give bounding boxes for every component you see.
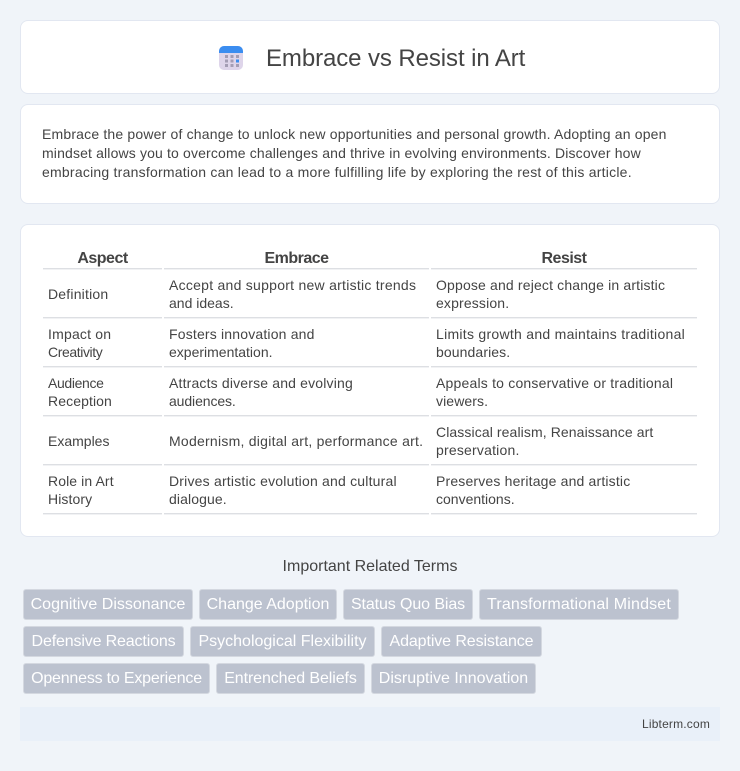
- related terms tags: Change Adoption: [207, 596, 329, 613]
- row: impact on creativity: Fosters innovation and: [169, 326, 315, 342]
- table header: Resist: [541, 250, 587, 267]
- intro text: [42, 126, 667, 180]
- row: audience reception: Appeals to conservative or traditional: [436, 375, 673, 391]
- row: impact on creativity: experimentation.: [169, 344, 273, 360]
- related terms tags: Adaptive Resistance: [390, 633, 533, 650]
- row: definition: Accept and support new artistic trends: [169, 277, 416, 293]
- footer bar: [20, 707, 720, 741]
- row: definition: Oppose and reject change in artistic: [436, 277, 665, 293]
- row: role in art history: conventions.: [436, 491, 515, 507]
- row: examples: preservation.: [436, 442, 520, 458]
- related terms tags: Openness to Experience: [31, 670, 202, 687]
- row: role in art history: History: [48, 491, 92, 507]
- related terms tags: Status Quo Bias: [351, 596, 465, 613]
- row: audience reception: Attracts diverse and evolving: [169, 375, 353, 391]
- table header: Aspect: [77, 250, 128, 267]
- intro text: embracing transformation can lead to a more fulfilling life by exploring the rest of this article.: [42, 164, 632, 180]
- row: role in art history: Role in Art: [48, 473, 114, 489]
- row: definition: [48, 277, 665, 311]
- row: impact on creativity: Limits growth and maintains traditional: [436, 326, 685, 342]
- row: examples: [48, 424, 654, 458]
- table header: [77, 250, 587, 267]
- comparison table panel: [20, 224, 720, 537]
- related terms tags: Transformational Mindset: [487, 596, 671, 613]
- intro text: mindset allows you to overcome challenges and thrive in evolving environments. Discover how: [42, 145, 641, 161]
- row: role in art history: Drives artistic evolution and cultural: [169, 473, 397, 489]
- related terms tags: [23, 589, 679, 694]
- table header: Embrace: [264, 250, 329, 267]
- row: examples: Modernism, digital art, performance art.: [169, 433, 423, 449]
- row: impact on creativity: Impact on: [48, 326, 111, 342]
- related terms tags: Cognitive Dissonance: [31, 596, 185, 613]
- title: Embrace vs Resist in Art: [266, 45, 525, 72]
- row: audience reception: Audience: [48, 375, 104, 391]
- related terms tags: Defensive Reactions: [32, 633, 175, 650]
- row: examples: Examples: [48, 433, 109, 449]
- row: role in art history: [48, 473, 630, 507]
- icon: calendar: [219, 46, 243, 70]
- row: audience reception: audiences.: [169, 393, 236, 409]
- row: audience reception: Reception: [48, 393, 112, 409]
- row: impact on creativity: Creativity: [48, 344, 102, 360]
- intro text: Embrace the power of change to unlock new opportunities and personal growth. Adopting an open: [42, 126, 667, 142]
- row: role in art history: Preserves heritage and artistic: [436, 473, 630, 489]
- row: impact on creativity: boundaries.: [436, 344, 510, 360]
- row: impact on creativity: [48, 326, 685, 360]
- header panel: [20, 20, 720, 94]
- row: definition: expression.: [436, 295, 509, 311]
- footer credit: Libterm.com: [642, 717, 710, 731]
- row: audience reception: viewers.: [436, 393, 488, 409]
- related terms tags: Psychological Flexibility: [198, 633, 367, 650]
- related terms tags: Disruptive Innovation: [379, 670, 528, 687]
- row: audience reception: [48, 375, 673, 409]
- row: definition: and ideas.: [169, 295, 234, 311]
- intro panel: [20, 104, 720, 204]
- row: examples: Classical realism, Renaissance art: [436, 424, 653, 440]
- related terms tags: Entrenched Beliefs: [224, 670, 357, 687]
- row: definition: Definition: [48, 286, 108, 302]
- related terms heading: Important Related Terms: [283, 558, 457, 575]
- row: role in art history: dialogue.: [169, 491, 227, 507]
